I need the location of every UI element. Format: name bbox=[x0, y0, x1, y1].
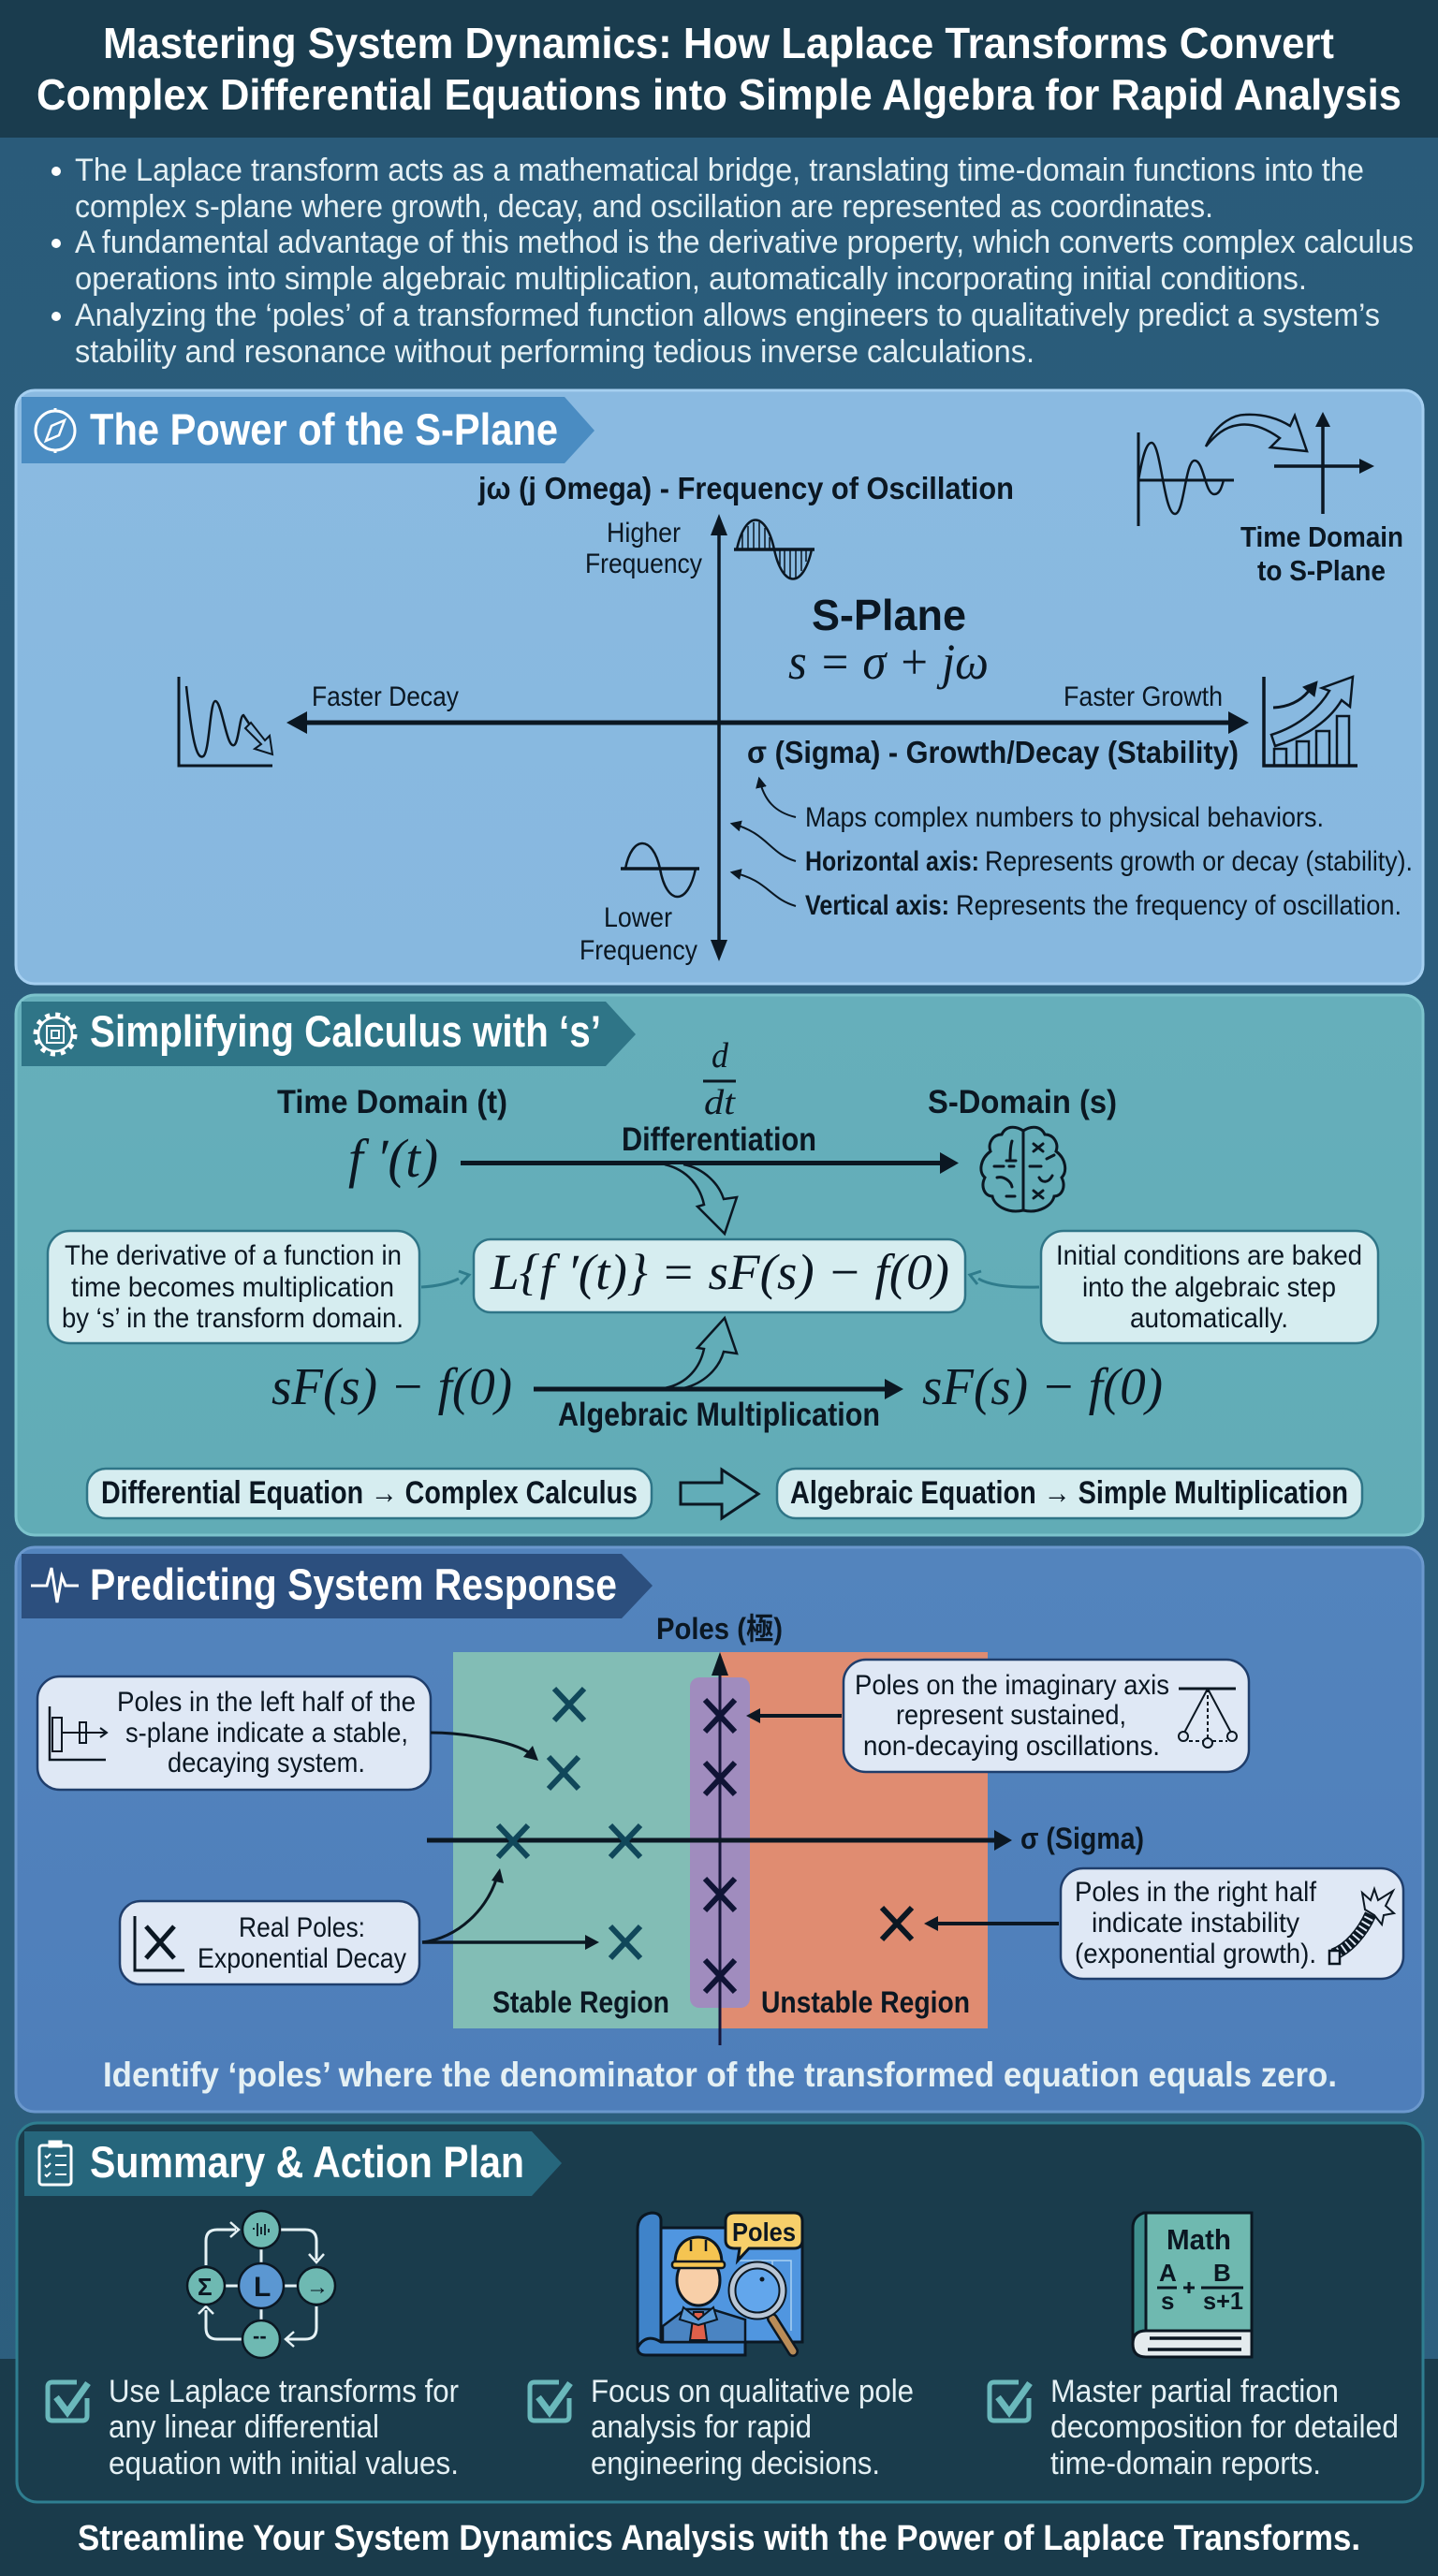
pill: differential equation: Differential Equation → Complex Calculus bbox=[101, 1475, 638, 1511]
annotation: maps complex numbers: Maps complex numbers to physical behaviors. bbox=[805, 802, 1324, 833]
label: differentiation: Differentiation bbox=[622, 1121, 816, 1158]
unstable pole bbox=[882, 1908, 912, 1939]
icon: laplace cycle diagram: L bbox=[254, 2272, 271, 2303]
action item 1: any linear differential bbox=[109, 2409, 379, 2445]
callout: derivative bbox=[48, 1231, 419, 1343]
intro bullet list bbox=[51, 153, 1414, 370]
panel: the power of the s-plane bbox=[16, 390, 1423, 984]
imaginary axis pole band bbox=[690, 1677, 750, 2008]
arrow: hollow up to formula bbox=[665, 1318, 737, 1388]
annotation: maps complex numbers bbox=[759, 779, 1324, 833]
label: higher frequency: Frequency bbox=[585, 549, 702, 579]
action item 1: Use Laplace transforms for bbox=[109, 2374, 459, 2409]
footer statement: Streamline Your System Dynamics Analysis with the Power of Laplace Transforms. bbox=[78, 2519, 1360, 2558]
callout: derivative: time becomes multiplication bbox=[71, 1272, 394, 1303]
intro bullet list: A fundamental advantage of this method is the derivative property, which converts complex calculus bbox=[75, 225, 1414, 260]
icon: math book: s+1 bbox=[1203, 2287, 1243, 2315]
unstable region bbox=[720, 1652, 988, 2028]
title banner: Mastering System Dynamics: How Laplace Transforms Convert bbox=[103, 19, 1334, 67]
icon: checkbox 3 bbox=[990, 2382, 1030, 2421]
icon: checkbox 1 bbox=[48, 2382, 88, 2421]
action item 1 bbox=[48, 2374, 459, 2481]
callout: real poles bbox=[120, 1901, 419, 1984]
label: s-domain: S-Domain (s) bbox=[928, 1084, 1117, 1120]
callout: initial conditions: Initial conditions are baked bbox=[1056, 1240, 1362, 1271]
action item 3: time-domain reports. bbox=[1050, 2446, 1321, 2481]
annotation: horizontal axis: Horizontal axis: bbox=[805, 846, 979, 877]
callout: real poles: Exponential Decay bbox=[198, 1943, 406, 1974]
label: unstable region: Unstable Region bbox=[761, 1985, 970, 2019]
annotation: vertical axis bbox=[732, 872, 1401, 921]
callout: right half poles: (exponential growth). bbox=[1075, 1939, 1316, 1969]
callout: imaginary axis poles bbox=[844, 1660, 1249, 1772]
intro bullet list: stability and resonance without performing tedious inverse calculations. bbox=[75, 334, 1034, 370]
section heading: summary and action plan: Summary & Action Plan bbox=[90, 2137, 524, 2187]
intro bullet list: operations into simple algebraic multiplication, automatically incorporating initial conditions. bbox=[75, 261, 1307, 297]
sigma axis label: σ (Sigma) - Growth/Decay (Stability) bbox=[747, 735, 1239, 769]
label: algebraic multiplication: Algebraic Multiplication bbox=[558, 1397, 880, 1433]
arrow: differentiation bbox=[461, 1152, 959, 1174]
arrows: real poles callout to poles bbox=[422, 1868, 599, 1950]
icon: laplace cycle diagram: → bbox=[306, 2275, 329, 2300]
callout: derivative: The derivative of a function in bbox=[65, 1240, 402, 1271]
arrow: hollow down to formula bbox=[665, 1164, 737, 1234]
arrow: derivative callout to formula bbox=[421, 1271, 469, 1287]
callout: derivative: by ‘s’ in the transform domain. bbox=[62, 1303, 404, 1334]
formula: f prime of t: f ′(t) bbox=[348, 1128, 438, 1189]
icon: math book: Math bbox=[1167, 2223, 1231, 2256]
horizontal axis arrow bbox=[286, 711, 1249, 734]
label: poles: Poles (極) bbox=[656, 1612, 783, 1646]
vertical axis arrow bbox=[711, 514, 727, 961]
callout: initial conditions: into the algebraic step bbox=[1082, 1272, 1336, 1303]
icon: laplace cycle diagram: -- bbox=[253, 2324, 267, 2348]
callout: left half poles: Poles in the left half of the bbox=[117, 1687, 416, 1718]
callout: left half poles: s-plane indicate a stable, bbox=[125, 1718, 408, 1749]
section heading: simplifying calculus bbox=[22, 1002, 636, 1066]
callout: right half poles: indicate instability bbox=[1092, 1908, 1299, 1939]
intro bullet list: complex s-plane where growth, decay, and oscillation are represented as coordinates. bbox=[75, 189, 1213, 225]
s-plane formula: s = σ + jω bbox=[788, 634, 989, 690]
callout: right half poles: Poles in the right half bbox=[1075, 1877, 1317, 1908]
icon: mass spring damper bbox=[50, 1706, 107, 1760]
arrow: left callout to poles bbox=[431, 1733, 538, 1761]
icon: gear chip bbox=[36, 1015, 75, 1054]
label: stable region: Stable Region bbox=[492, 1985, 669, 2019]
arrow: hollow block arrow bbox=[681, 1470, 758, 1518]
icon: laplace cycle diagram bbox=[187, 2211, 335, 2358]
action item 3 bbox=[990, 2374, 1399, 2481]
arrow: right callout to pole bbox=[924, 1916, 1059, 1931]
intro bullet list: Analyzing the ‘poles’ of a transformed function allows engineers to qualitatively predict a system’s bbox=[75, 298, 1380, 333]
stable region bbox=[453, 1652, 720, 2028]
icon: engineer blueprint bbox=[638, 2213, 802, 2355]
title banner bbox=[0, 0, 1438, 138]
icon: brain bbox=[981, 1127, 1065, 1211]
section heading: predicting system response bbox=[22, 1554, 653, 1618]
callout: left half poles: decaying system. bbox=[168, 1748, 365, 1778]
arrow: initial conditions to formula bbox=[970, 1271, 1039, 1287]
callout: imaginary axis poles: Poles on the imaginary axis bbox=[855, 1670, 1169, 1701]
stable poles bbox=[498, 1689, 640, 1958]
icon: checkbox 2 bbox=[530, 2382, 570, 2421]
section heading: summary and action plan bbox=[24, 2131, 562, 2196]
callout: right half poles bbox=[1061, 1868, 1403, 1979]
action item 3: decomposition for detailed bbox=[1050, 2409, 1399, 2445]
label: lower frequency: Lower bbox=[604, 902, 672, 933]
label: faster decay: Faster Decay bbox=[312, 681, 459, 712]
callout: imaginary axis poles: represent sustained, bbox=[896, 1700, 1126, 1731]
label: time domain to s-plane: Time Domain bbox=[1240, 520, 1403, 553]
panel: predicting system response bbox=[16, 1547, 1423, 2112]
real axis arrow bbox=[427, 1830, 1012, 1851]
derivative operator bbox=[703, 1036, 737, 1122]
icon: growth chart bbox=[1264, 677, 1357, 766]
icon: low frequency wave bbox=[621, 843, 699, 897]
pill: differential equation bbox=[87, 1469, 652, 1518]
action item 2: Focus on qualitative pole bbox=[591, 2374, 914, 2409]
label: time domain to s-plane: to S-Plane bbox=[1257, 554, 1386, 587]
icon: engineer blueprint: Poles bbox=[732, 2217, 796, 2247]
intro bullet list: The Laplace transform acts as a mathematical bridge, translating time-domain functions into the bbox=[75, 153, 1364, 188]
formula: right s-domain expression: sF(s) − f(0) bbox=[922, 1358, 1163, 1416]
panel: summary and action plan bbox=[17, 2123, 1423, 2502]
icon: pole on axes bbox=[135, 1916, 184, 1970]
callout: initial conditions: automatically. bbox=[1130, 1303, 1288, 1334]
arrow: imaginary callout to pole bbox=[746, 1708, 842, 1723]
imaginary axis arrow bbox=[712, 1652, 728, 2045]
icon: pendulum bbox=[1179, 1689, 1237, 1748]
action item 2: analysis for rapid bbox=[591, 2409, 812, 2445]
label: faster growth: Faster Growth bbox=[1064, 681, 1223, 712]
label: time domain to s-plane bbox=[1240, 520, 1403, 587]
label: sigma: σ (Sigma) bbox=[1020, 1822, 1144, 1855]
action item 3: Master partial fraction bbox=[1050, 2374, 1339, 2409]
icon: math book: B bbox=[1213, 2259, 1231, 2287]
action item 2: engineering decisions. bbox=[591, 2446, 880, 2481]
section heading: predicting system response: Predicting System Response bbox=[90, 1559, 617, 1609]
icon: math book: s bbox=[1161, 2287, 1174, 2315]
icon: math book bbox=[1133, 2213, 1252, 2357]
arrow: algebraic multiplication bbox=[534, 1379, 903, 1399]
annotation: vertical axis: Vertical axis: bbox=[805, 890, 949, 921]
annotation: vertical axis: Represents the frequency of oscillation. bbox=[956, 890, 1401, 921]
icon: compass bbox=[36, 408, 75, 453]
icon: decay curve bbox=[179, 677, 272, 766]
derivative operator: dt bbox=[704, 1083, 737, 1122]
vertical axis label: jω (j Omega) - Frequency of Oscillation bbox=[477, 471, 1014, 505]
label: time domain: Time Domain (t) bbox=[277, 1084, 507, 1120]
label: higher frequency: Higher bbox=[607, 518, 681, 549]
section heading: simplifying calculus: Simplifying Calculus with ‘s’ bbox=[90, 1006, 601, 1056]
action item 1: equation with initial values. bbox=[109, 2446, 459, 2481]
callout: left half poles bbox=[37, 1676, 431, 1790]
section heading: the power of the s-plane bbox=[22, 397, 594, 463]
statement: identify poles: Identify ‘poles’ where the denominator of the transformed equation equals zero. bbox=[103, 2056, 1337, 2094]
label: lower frequency: Frequency bbox=[580, 935, 697, 966]
icon: high frequency wave bbox=[734, 520, 814, 578]
panel: simplifying calculus with s bbox=[16, 995, 1423, 1535]
callout: imaginary axis poles: non-decaying oscillations. bbox=[863, 1731, 1160, 1762]
callout: initial conditions bbox=[1041, 1231, 1378, 1343]
icon: spring burst bbox=[1329, 1889, 1394, 1964]
label: higher frequency bbox=[585, 518, 702, 579]
imaginary axis poles bbox=[705, 1700, 735, 1992]
icon: laplace cycle diagram: Σ bbox=[198, 2273, 213, 2301]
icon: clipboard bbox=[39, 2141, 71, 2185]
icon: time domain to s-plane bbox=[1138, 412, 1374, 526]
annotation: horizontal axis bbox=[732, 824, 1413, 877]
formula: left s-domain expression: sF(s) − f(0) bbox=[271, 1358, 512, 1416]
icon: math book: A bbox=[1159, 2259, 1177, 2287]
action item 2 bbox=[530, 2374, 914, 2481]
pill: algebraic equation bbox=[777, 1469, 1362, 1518]
section heading: the power of the s-plane: The Power of the S-Plane bbox=[90, 404, 558, 454]
s-plane formula bbox=[788, 591, 989, 690]
callout: real poles: Real Poles: bbox=[239, 1912, 365, 1943]
title banner: Complex Differential Equations into Simple Algebra for Rapid Analysis bbox=[37, 70, 1401, 119]
pill: algebraic equation: Algebraic Equation → Simple Multiplication bbox=[790, 1475, 1348, 1511]
s-plane formula: S-Plane bbox=[812, 591, 966, 639]
icon: pulse bbox=[31, 1568, 79, 1603]
derivative operator: d bbox=[712, 1036, 729, 1076]
formula box: laplace of derivative: L{f ′(t)} = sF(s) − f(0) bbox=[490, 1244, 949, 1300]
label: lower frequency bbox=[580, 902, 697, 966]
